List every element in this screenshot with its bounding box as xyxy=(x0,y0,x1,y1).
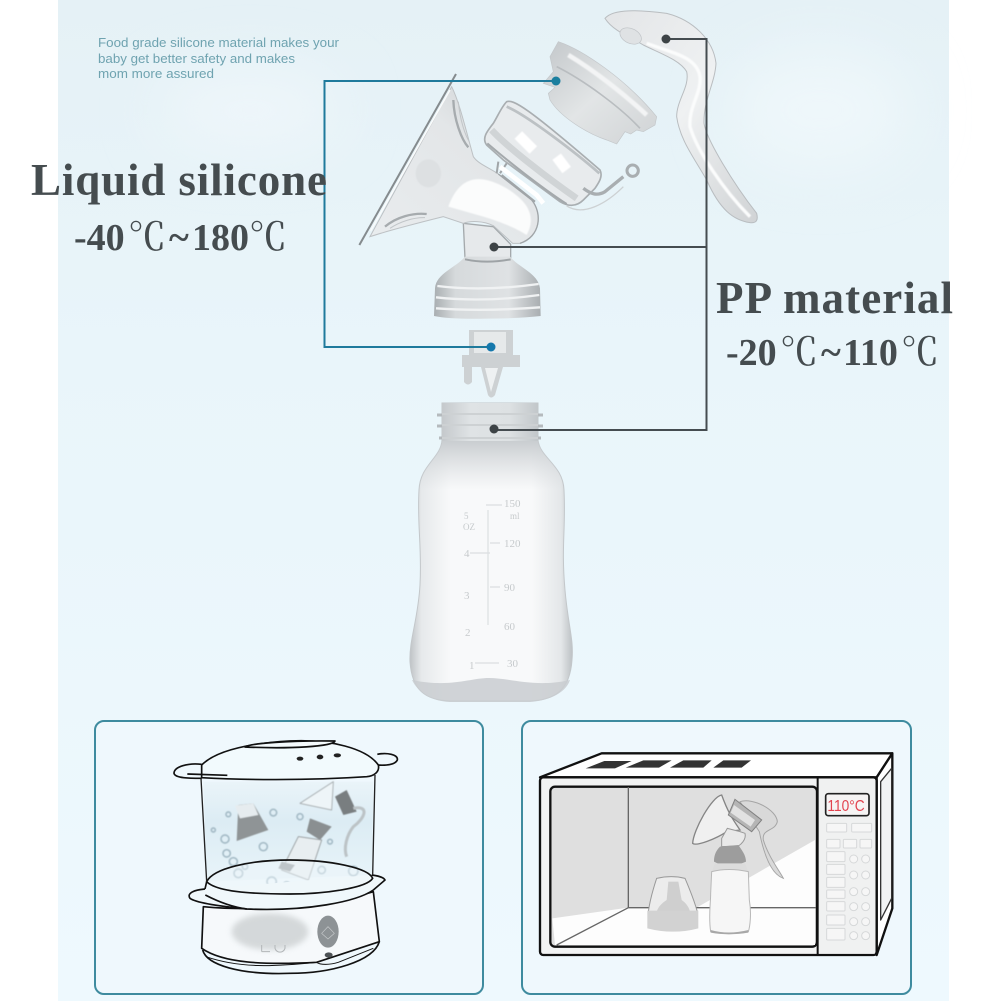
label: liquid silicone: -40 xyxy=(74,217,125,259)
label: PP material xyxy=(716,273,953,376)
microwave vents xyxy=(586,760,751,768)
bottle scale markings: ml xyxy=(510,511,520,521)
label: liquid silicone: ℃ xyxy=(249,206,287,261)
icon: steamer illustration xyxy=(174,741,397,974)
microwave contents: pump, bottle and cap xyxy=(647,795,783,934)
bottle scale markings xyxy=(463,498,521,672)
microwave door window xyxy=(550,787,817,947)
microwave control panel xyxy=(818,777,875,955)
bottle scale markings: 2 xyxy=(465,627,470,639)
bottle scale markings: 120 xyxy=(504,538,521,550)
bottle scale markings: 150 xyxy=(504,498,521,510)
part: chamber cylinder xyxy=(485,101,601,205)
steamer glass walls xyxy=(201,775,375,882)
label: PP material: PP material xyxy=(716,273,953,323)
steamer lid xyxy=(174,741,397,780)
bottle scale markings: OZ xyxy=(463,522,475,532)
part: duckbill valve xyxy=(462,330,520,398)
part: small valve arm xyxy=(567,165,638,210)
label: PP material: 110 xyxy=(843,332,898,374)
breast pump illustration xyxy=(359,11,757,702)
label: PP material: -20 xyxy=(726,332,777,374)
part: feeding bottle xyxy=(410,403,572,702)
label: liquid silicone: Liquid silicone xyxy=(31,155,327,205)
steamer control dial xyxy=(262,916,339,958)
part: silicone diaphragm cap xyxy=(543,42,657,144)
label: liquid silicone xyxy=(31,155,327,261)
bottle scale markings: 90 xyxy=(504,582,516,594)
bottle scale markings: 3 xyxy=(464,590,470,602)
icon: microwave illustration xyxy=(540,753,892,955)
part: threaded collar xyxy=(434,257,541,319)
description text: baby get better safety and makes xyxy=(98,51,296,66)
bottle scale markings: 4 xyxy=(464,548,470,560)
label: PP material: ~ xyxy=(821,332,841,374)
description text: Food grade silicone material makes your xyxy=(98,35,340,50)
description text: mom more assured xyxy=(98,66,214,81)
label: liquid silicone: ~ xyxy=(169,217,189,259)
dark callout lines: PP material parts xyxy=(494,39,706,430)
bottle scale markings: 60 xyxy=(504,621,516,633)
part: silicone flange and pump body xyxy=(359,74,538,258)
callout dots xyxy=(486,34,670,434)
part: pump handle xyxy=(605,11,757,223)
panel: steam sterilizer xyxy=(95,721,483,994)
microwave display: 110°C: 110°C xyxy=(827,798,865,815)
label: liquid silicone: ℃ xyxy=(128,206,166,261)
steamer contents: pump, bottle and bubbles xyxy=(211,782,364,888)
label: liquid silicone: 180 xyxy=(192,217,249,259)
blue callout lines: liquid silicone parts xyxy=(324,81,556,347)
steamer base xyxy=(189,860,385,974)
bottle scale markings: 1 xyxy=(469,660,474,672)
bottle scale markings: 5 xyxy=(464,511,469,521)
bottle scale markings: 30 xyxy=(507,658,518,670)
label: PP material: ℃ xyxy=(901,321,939,376)
description text xyxy=(98,35,340,81)
label: PP material: ℃ xyxy=(780,321,818,376)
panel: microwave xyxy=(522,721,911,994)
